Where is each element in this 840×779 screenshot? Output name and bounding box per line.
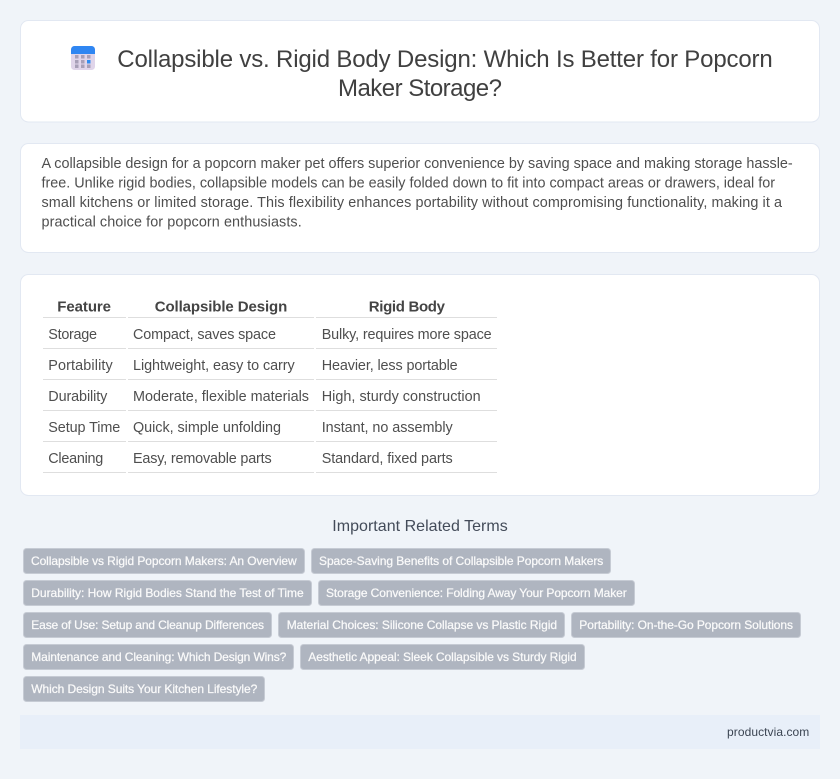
tag: Collapsible vs Rigid Popcorn Makers: An Overview bbox=[31, 554, 297, 568]
tag: Maintenance and Cleaning: Which Design Wins? bbox=[31, 650, 287, 664]
table header bbox=[43, 299, 497, 318]
heading: important related terms: Important Related Terms bbox=[332, 518, 508, 535]
table row: portability: Lightweight, easy to carry bbox=[133, 358, 295, 374]
tag: Storage Convenience: Folding Away Your Popcorn Maker bbox=[326, 586, 627, 600]
table header: Feature bbox=[57, 299, 111, 316]
tag list: related terms bbox=[24, 548, 800, 702]
table row: setup time: Setup Time bbox=[48, 420, 120, 436]
title: Maker Storage? bbox=[338, 75, 502, 102]
icon: calendar bbox=[71, 46, 95, 70]
table row: storage bbox=[43, 327, 497, 349]
text block: description paragraph: free. Unlike rigid bodies, collapsible models can be easily folded down to fit into compact areas or drawers, ideal for bbox=[42, 176, 775, 192]
tag: Ease of Use: Setup and Cleanup Differences bbox=[31, 618, 264, 632]
text block: description paragraph: practical choice for popcorn enthusiasts. bbox=[42, 214, 302, 230]
tag bbox=[300, 644, 584, 670]
text block: description paragraph bbox=[42, 156, 793, 230]
tag: Space-Saving Benefits of Collapsible Popcorn Makers bbox=[319, 554, 603, 568]
footer bar bbox=[20, 715, 820, 749]
table row: cleaning bbox=[43, 451, 497, 473]
tag bbox=[24, 676, 264, 702]
table row: durability bbox=[43, 389, 497, 411]
tag: Which Design Suits Your Kitchen Lifestyle? bbox=[31, 682, 258, 696]
tag bbox=[318, 580, 634, 606]
tag: Durability: How Rigid Bodies Stand the Test of Time bbox=[31, 586, 304, 600]
table row: portability: Portability bbox=[48, 358, 113, 374]
tag bbox=[278, 612, 564, 638]
table row: cleaning: Standard, fixed parts bbox=[322, 451, 453, 467]
tag bbox=[572, 612, 800, 638]
table row: durability: Durability bbox=[48, 389, 108, 405]
tag: Material Choices: Silicone Collapse vs Plastic Rigid bbox=[287, 618, 557, 632]
table row: portability: Heavier, less portable bbox=[322, 358, 458, 374]
tag bbox=[24, 580, 312, 606]
table row: durability: Moderate, flexible materials bbox=[133, 389, 309, 405]
title: Collapsible vs. Rigid Body Design: Which Is Better for Popcorn bbox=[117, 46, 773, 73]
table row: portability bbox=[43, 358, 497, 380]
table row: setup time bbox=[43, 420, 497, 442]
tag bbox=[24, 548, 304, 574]
panel: description bbox=[20, 144, 820, 252]
tag: Portability: On-the-Go Popcorn Solutions bbox=[579, 618, 793, 632]
tag bbox=[24, 644, 294, 670]
table row: cleaning: Cleaning bbox=[48, 451, 103, 467]
table row: cleaning: Easy, removable parts bbox=[133, 451, 272, 467]
table row: storage: Bulky, requires more space bbox=[322, 327, 492, 343]
table row: setup time: Quick, simple unfolding bbox=[133, 420, 281, 436]
table header: Rigid Body bbox=[369, 299, 446, 316]
panel: comparison table bbox=[20, 274, 820, 496]
table row: storage: Compact, saves space bbox=[133, 327, 276, 343]
table header: Collapsible Design bbox=[155, 299, 287, 316]
table row: setup time: Instant, no assembly bbox=[322, 420, 453, 436]
text block: description paragraph: A collapsible design for a popcorn maker pet offers superior convenience by saving space and making storage hassle- bbox=[42, 156, 793, 172]
tag: Aesthetic Appeal: Sleek Collapsible vs Sturdy Rigid bbox=[308, 650, 577, 664]
panel: title header bbox=[20, 20, 820, 122]
table row: durability: High, sturdy construction bbox=[322, 389, 481, 405]
footer bar: productvia.com bbox=[727, 725, 809, 739]
tag bbox=[312, 548, 610, 574]
title bbox=[117, 46, 773, 102]
tag bbox=[24, 612, 272, 638]
text block: description paragraph: small kitchens or limited storage. This flexibility enhances portability without compromising functionality, making it a bbox=[42, 195, 782, 211]
table row: storage: Storage bbox=[48, 327, 97, 343]
